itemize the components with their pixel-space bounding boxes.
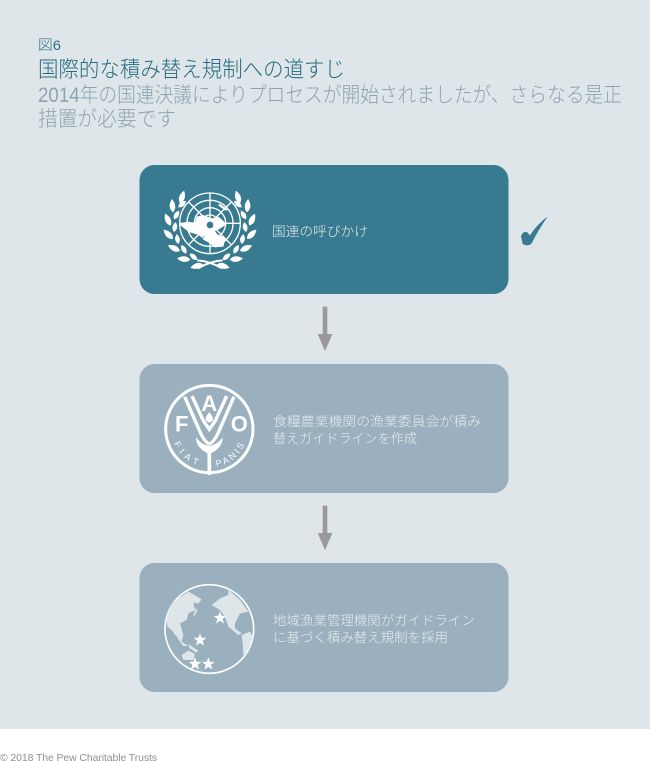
check mark — [521, 217, 548, 245]
panel: FAO guidelines — [140, 364, 508, 493]
label: FAO: 替えガイドラインを作成 — [273, 431, 417, 446]
panel: UN call — [140, 165, 508, 294]
label: RFMO: 地域漁業管理機関がガイドライン — [273, 613, 475, 628]
label: FAO — [273, 414, 481, 446]
arrow 1 — [318, 307, 332, 351]
box: RFMO — [140, 563, 508, 692]
icon: FAO emblem: O — [231, 412, 248, 437]
icon: FAO emblem — [164, 384, 254, 475]
icon: FAO emblem: FIAT — [174, 441, 199, 464]
panel: RFMO rules — [140, 563, 508, 692]
icon: FAO emblem: F — [175, 412, 188, 437]
label: RFMO: に基づく積み替え規制を採用 — [273, 630, 448, 645]
icon: FAO emblem: PANIS — [216, 442, 244, 467]
label: RFMO — [273, 613, 475, 645]
title: 国際的な積み替え規制への道すじ — [38, 57, 345, 82]
label: FAO: 食糧農業機関の漁業委員会が積み — [273, 414, 481, 429]
icon: globe with stars — [165, 585, 254, 673]
box: FAO — [140, 364, 508, 493]
icon: FAO emblem: A — [201, 391, 217, 416]
subtitle — [38, 84, 622, 131]
figure label: 図6 — [38, 37, 61, 53]
icon: UN emblem — [162, 190, 258, 271]
label: UN: 国連の呼びかけ — [272, 224, 368, 239]
box: UN — [140, 165, 508, 294]
arrow 2 — [318, 506, 332, 550]
subtitle: 措置が必要です — [38, 108, 176, 131]
